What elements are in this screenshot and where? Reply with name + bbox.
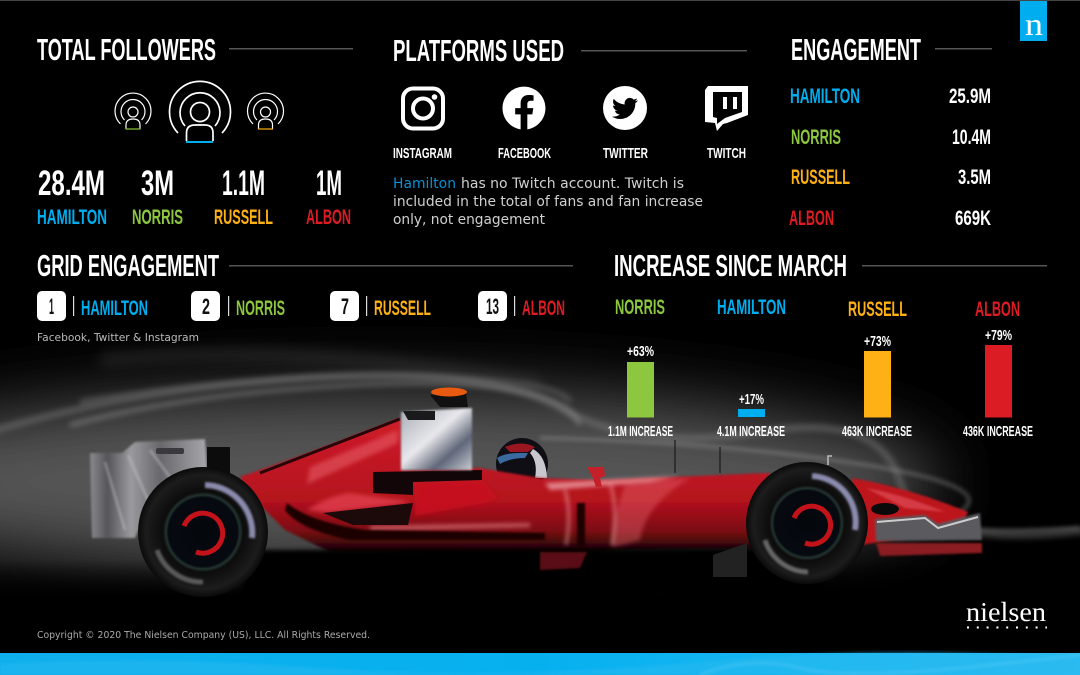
bar: albon [963, 298, 1033, 440]
icon: norris follower [115, 93, 151, 129]
body highlights [307, 430, 690, 548]
main body [240, 418, 775, 556]
cooling slot [577, 503, 585, 547]
follower driver names [37, 206, 351, 229]
engagement table: 669K [955, 207, 991, 230]
copyright: Copyright © 2020 The Nielsen Company (US), LLC. All Rights Reserved. [37, 630, 370, 641]
follower numbers: 1.1M [222, 164, 265, 203]
lower dark floor [240, 548, 830, 598]
follower numbers: 3M [141, 164, 174, 203]
engagement table [789, 85, 991, 230]
rank: albon: ALBON [522, 297, 565, 320]
bar: russell [842, 298, 912, 440]
bar: norris: 1.1M INCREASE [608, 423, 673, 440]
rank: hamilton [37, 291, 148, 321]
panel: engagement [789, 32, 992, 230]
icon: facebook [502, 87, 545, 129]
rank: russell [330, 291, 431, 321]
heading: increase since march: INCREASE SINCE MARCH [614, 248, 847, 283]
nose [852, 478, 968, 545]
engine cover top stripe [260, 419, 400, 473]
icon: russell follower [248, 93, 284, 129]
panel: grid engagement [37, 248, 573, 344]
platform note [393, 176, 703, 228]
blue wave band [0, 652, 1080, 675]
helmet [496, 438, 548, 490]
bar: hamilton: 4.1M INCREASE [717, 423, 785, 440]
engagement table: 25.9M [949, 85, 991, 108]
platform note: Hamilton [393, 176, 456, 192]
follower numbers: 28.4M [38, 164, 105, 203]
engagement table: RUSSELL [791, 166, 850, 189]
orange intake [430, 393, 468, 407]
follower numbers [38, 164, 342, 203]
sidepod inlet [373, 470, 482, 495]
front wing [875, 513, 982, 541]
platform labels [393, 145, 746, 162]
icon: instagram [403, 88, 443, 128]
lower bargeboard [540, 552, 587, 570]
bar: norris: +63% [627, 343, 654, 360]
follower driver names: ALBON [306, 206, 351, 229]
mirror [587, 467, 605, 487]
rank: hamilton: HAMILTON [81, 297, 148, 320]
bar: hamilton: +17% [739, 391, 764, 408]
nielsen logo: nielsen [966, 597, 1047, 627]
heading: total followers: TOTAL FOLLOWERS [37, 32, 216, 67]
follower numbers: 1M [316, 164, 342, 203]
platform note: included in the total of fans and fan increase [393, 194, 703, 210]
rear wheel [138, 467, 268, 597]
air box [401, 408, 472, 470]
bar: norris: NORRIS [615, 296, 665, 319]
icon: twitch [705, 86, 748, 131]
engagement table: 3.5M [958, 166, 991, 189]
rank: albon: 13 [486, 294, 499, 319]
rank: russell: RUSSELL [374, 297, 431, 320]
engagement table: NORRIS [791, 126, 841, 149]
bar: hamilton [717, 296, 786, 440]
platform note: has no Twitch account. Twitch is [461, 176, 684, 192]
smoke background [0, 354, 1080, 653]
follower driver names: HAMILTON [37, 206, 107, 229]
dark side curve [285, 503, 545, 540]
grid note: Facebook, Twitter & Instagram [37, 331, 199, 344]
bar: hamilton: HAMILTON [717, 296, 786, 319]
rank: norris [191, 291, 285, 321]
rank: russell: 7 [341, 294, 349, 319]
heading: grid engagement: GRID ENGAGEMENT [37, 248, 219, 283]
panel: total followers [37, 32, 353, 229]
icon: nielsen n badge [1020, 1, 1047, 42]
rear wing [90, 439, 230, 538]
platform labels: FACEBOOK [498, 145, 551, 162]
heading: platforms used: PLATFORMS USED [393, 33, 564, 68]
rank: hamilton: 1 [49, 294, 54, 319]
panel: increase since march [608, 248, 1047, 440]
platform labels: TWITTER [603, 145, 648, 162]
bar: albon: 436K INCREASE [963, 423, 1033, 440]
platform labels: TWITCH [707, 145, 746, 162]
platform labels: INSTAGRAM [393, 145, 452, 162]
follower driver names: NORRIS [132, 206, 183, 229]
follower driver names: RUSSELL [214, 206, 273, 229]
bar: norris [608, 296, 673, 440]
bar: russell: RUSSELL [848, 298, 907, 321]
bar: albon: ALBON [975, 298, 1020, 321]
front wheel [746, 462, 868, 584]
antennas [675, 440, 720, 473]
engagement table: 10.4M [952, 126, 991, 149]
icon: hamilton follower [169, 81, 230, 142]
rank: norris: NORRIS [236, 297, 285, 320]
bar: russell: 463K INCREASE [842, 423, 912, 440]
panel: platforms used [393, 33, 748, 228]
icon: nielsen n badge: n [1025, 6, 1043, 42]
racing car [90, 388, 982, 598]
icon: twitter [603, 86, 647, 130]
bar: russell: +73% [864, 333, 891, 350]
front suspension block [713, 543, 747, 577]
platform note: only, not engagement [393, 212, 545, 228]
rank: norris: 2 [202, 294, 210, 319]
heading: engagement: ENGAGEMENT [791, 32, 921, 67]
rank: albon [478, 291, 565, 321]
engagement table: HAMILTON [790, 85, 860, 108]
engagement table: ALBON [789, 207, 834, 230]
bar: albon: +79% [985, 327, 1012, 344]
